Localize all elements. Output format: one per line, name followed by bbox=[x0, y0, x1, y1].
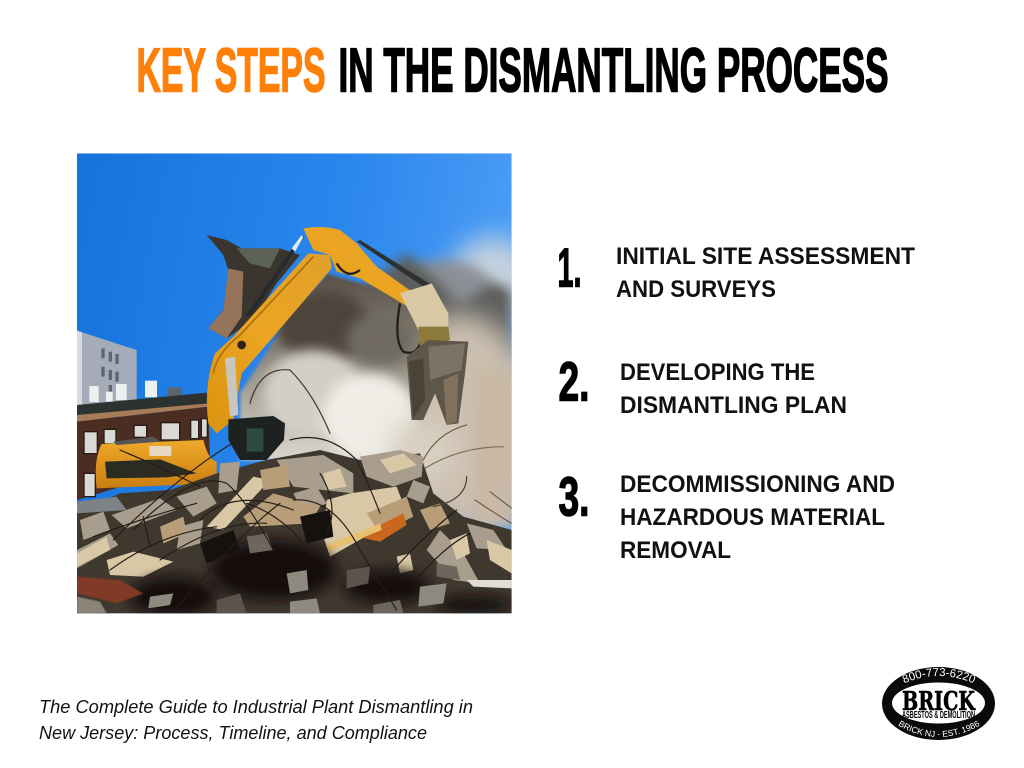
footer guide title: The Complete Guide to Industrial Plant Dismantling in bbox=[39, 697, 473, 717]
step 2 number: 2. bbox=[558, 350, 590, 412]
rooftop chimneys bbox=[89, 381, 182, 402]
background building bbox=[77, 331, 137, 407]
step 2 text bbox=[620, 359, 847, 419]
brick building bbox=[77, 393, 210, 500]
step 1 text: AND SURVEYS bbox=[616, 276, 776, 303]
title bbox=[136, 36, 888, 106]
step 1 text bbox=[616, 243, 915, 303]
sky bbox=[77, 153, 512, 613]
logo: Brick Asbestos & Demolition: BRICK bbox=[902, 687, 976, 717]
step 1 text: INITIAL SITE ASSESSMENT bbox=[616, 243, 915, 270]
excavator stick bbox=[303, 227, 448, 353]
step 2 text: DISMANTLING PLAN bbox=[620, 392, 847, 419]
excavator body bbox=[96, 437, 217, 488]
debris pile bbox=[77, 450, 512, 617]
step 2 text: DEVELOPING THE bbox=[620, 359, 815, 386]
step 3 number: 3. bbox=[558, 466, 590, 528]
title: KEY STEPS bbox=[136, 36, 326, 106]
step 1 bbox=[558, 236, 915, 303]
rebar wires bbox=[93, 370, 512, 610]
step 3 bbox=[558, 466, 895, 564]
excavator boom bbox=[207, 235, 332, 433]
demolition shear bbox=[407, 327, 468, 425]
step 1 number: 1. bbox=[558, 236, 582, 298]
photo: excavator demolishing a building bbox=[77, 153, 537, 617]
logo: Brick Asbestos & Demolition: BRICK NJ - EST. 1986 bbox=[898, 720, 980, 737]
step 3 text: REMOVAL bbox=[620, 537, 731, 564]
ruined wall bbox=[207, 235, 300, 338]
footer guide title bbox=[39, 697, 473, 743]
logo: Brick Asbestos & Demolition bbox=[882, 667, 995, 740]
footer guide title: New Jersey: Process, Timeline, and Compliance bbox=[39, 723, 427, 743]
step 3 text bbox=[620, 471, 895, 564]
step 2 bbox=[558, 350, 847, 419]
step 3 text: HAZARDOUS MATERIAL bbox=[620, 504, 885, 531]
smoke and dust backdrop bbox=[240, 237, 537, 533]
step 3 text: DECOMMISSIONING AND bbox=[620, 471, 895, 498]
logo: Brick Asbestos & Demolition: 800-773-6220 bbox=[902, 668, 976, 683]
cab machinery bbox=[228, 416, 285, 460]
